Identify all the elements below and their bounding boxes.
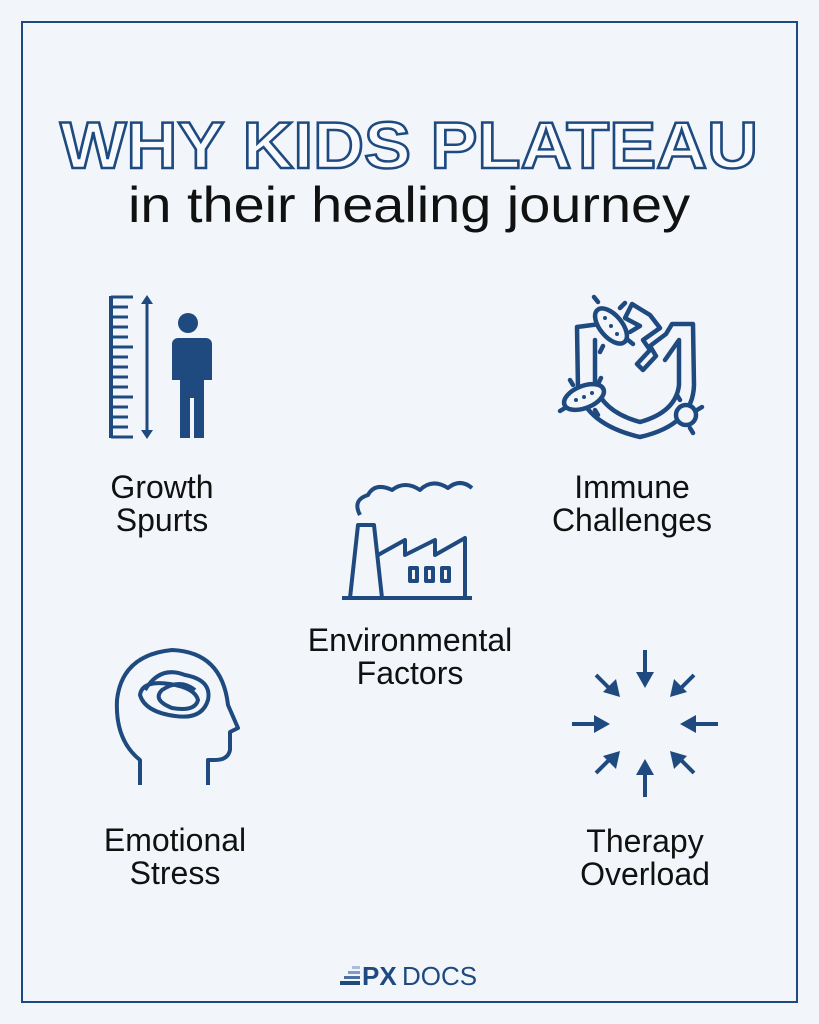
logo [340,961,477,991]
label: environmental factors: Environmental [308,622,512,658]
label: immune challenges: Challenges [552,502,712,538]
label: growth spurts: Spurts [116,502,208,538]
icon: immune shield [560,297,702,437]
icon: arrows inward [572,650,718,797]
subtitle: in their healing journey [128,177,690,233]
icon: growth [111,295,212,439]
label: emotional stress: Emotional [104,822,246,858]
label: therapy overload: Overload [580,856,710,892]
logo: PX [362,961,397,991]
label: immune challenges: Immune [574,469,690,505]
icon: head with tangled thoughts [117,650,238,785]
icon: factory [342,483,472,598]
label: growth spurts: Growth [110,469,214,505]
title: WHY KIDS PLATEAU [60,108,758,182]
label: environmental factors: Factors [357,655,463,691]
logo: DOCS [402,961,477,991]
label: therapy overload: Therapy [586,823,704,859]
title [60,108,758,233]
label: emotional stress: Stress [130,855,220,891]
